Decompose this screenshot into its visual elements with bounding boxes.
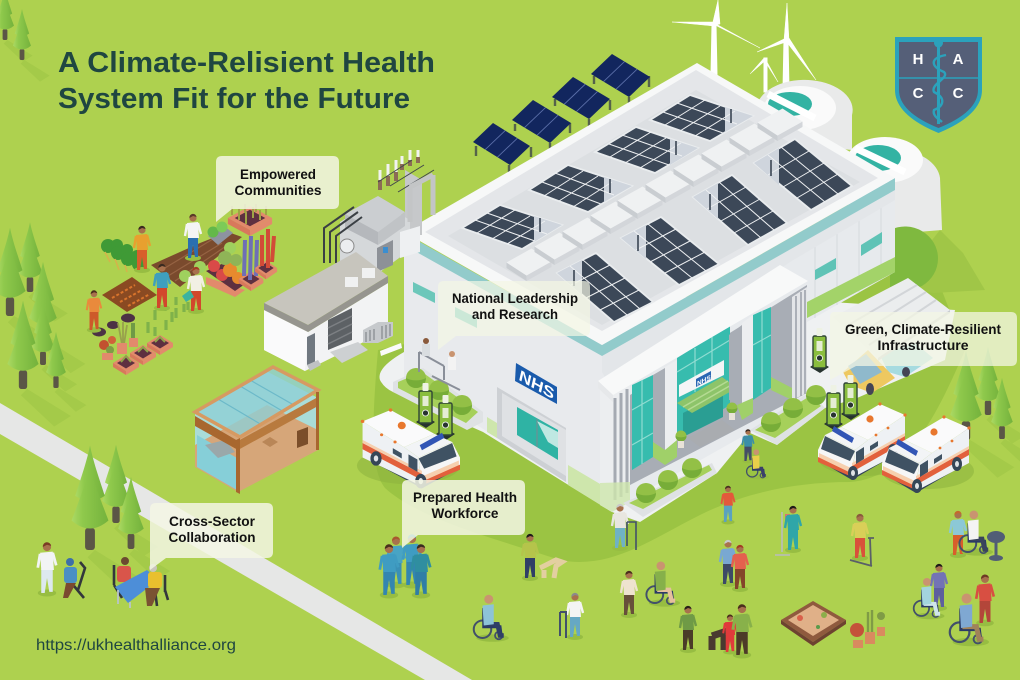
small planters (113, 335, 173, 375)
title: System Fit for the Future (58, 83, 410, 115)
callout: cross-sector collaboration: Collaboration (168, 529, 256, 545)
potted plants (99, 322, 138, 360)
roof ridge vents (506, 108, 802, 281)
glass wall left (632, 375, 653, 470)
trees: right side (950, 347, 1020, 478)
barbecue group (950, 511, 966, 558)
right wall (602, 185, 895, 510)
seedlings (148, 297, 188, 336)
callout: empowered communities (216, 156, 339, 222)
storage tanks (757, 80, 942, 235)
grey pier and white column right (729, 325, 742, 400)
parked blue car (880, 343, 933, 377)
logo shield: C (953, 85, 964, 102)
wheelchair child (646, 561, 680, 607)
callout: green climate-resilient infrastructure (830, 312, 1017, 380)
planter: right (750, 385, 826, 445)
callout: cross-sector collaboration (150, 503, 273, 570)
callout: national leadership and research: National Leadership (452, 290, 578, 306)
hospital plaza (380, 290, 955, 522)
ambulance left (357, 408, 460, 488)
callout: green climate-resilient infrastructure: Infrastructure (878, 337, 969, 353)
glass wall right (753, 307, 771, 400)
back walls (195, 372, 318, 462)
entrance doors (683, 393, 723, 437)
planter with purple plants (239, 236, 263, 291)
elder with carer (720, 540, 736, 587)
carer and wheelchair elder (976, 574, 994, 626)
wind turbines (672, 0, 816, 92)
road (0, 403, 472, 680)
hospital building (404, 63, 895, 512)
timber beams and posts (195, 416, 238, 450)
people: prepared health workforce (380, 534, 430, 598)
trees: left group (0, 222, 86, 426)
callout: national leadership and research (438, 281, 590, 350)
trees: top-left corner (0, 0, 50, 82)
glass shelter (195, 367, 319, 494)
man with leg cast (680, 606, 696, 653)
ground solar arrays (473, 54, 650, 174)
potted plants (850, 610, 885, 648)
callout: green climate-resilient infrastructure: Green, Climate-Resilient (845, 321, 1001, 337)
planter: front (623, 458, 717, 517)
seated man in red (114, 557, 131, 598)
sandbox (781, 601, 846, 646)
seated elder in yellow (145, 564, 168, 606)
doctor (38, 542, 56, 596)
corner column (600, 382, 630, 512)
blue table (115, 570, 158, 608)
people: hospital forecourt (612, 429, 769, 551)
title: A Climate-Relisient Health (58, 47, 435, 79)
EV chargers (416, 328, 860, 440)
large green bush behind the building (890, 226, 985, 293)
left wall small windows (413, 282, 435, 303)
people: lower crowd (474, 506, 1005, 658)
planter: left (393, 368, 483, 430)
crop bed 2 (102, 277, 157, 312)
teal fascia (404, 178, 895, 356)
planter with seedlings (228, 204, 272, 236)
roof frame (195, 367, 318, 437)
small NHS sign (679, 360, 724, 397)
roof solar panels: row 1 (462, 95, 753, 249)
entrance awning (677, 377, 737, 413)
gardeners (134, 226, 150, 273)
side door (497, 387, 566, 482)
front glass (197, 435, 237, 490)
doormat (688, 420, 735, 447)
lettuce patch (101, 239, 146, 272)
people: cross-sector meeting (38, 542, 168, 608)
title (58, 47, 435, 115)
person with guide dog (522, 534, 538, 581)
portico top (598, 265, 808, 395)
ambulance right 1 (818, 402, 910, 480)
right wall windows (815, 258, 836, 280)
callout: empowered communities: Communities (234, 182, 322, 198)
woman with walker (567, 593, 583, 640)
standing man (621, 571, 637, 618)
crop bed 1 (151, 232, 242, 287)
ticket kiosk (297, 427, 308, 448)
left wall (404, 237, 612, 512)
callout: cross-sector collaboration: Cross-Sector (169, 513, 256, 529)
logo shield: H (913, 51, 923, 68)
seated woman (63, 558, 85, 598)
callout: empowered communities: Empowered (240, 166, 316, 182)
logo shield (895, 37, 982, 133)
wall under roof (602, 190, 895, 388)
portico column right (792, 287, 807, 400)
logo shield: C (913, 85, 924, 102)
nurse and patient (931, 564, 947, 611)
ambulance right 2 (882, 415, 974, 493)
shaded lawn under the hospital (374, 260, 965, 562)
floor (195, 405, 318, 492)
roof floor (448, 90, 860, 325)
wall base green strips (487, 417, 497, 438)
community garden (87, 204, 277, 375)
logo shield: A (953, 51, 964, 68)
wheelchair user (474, 595, 509, 642)
NHS sign: NHS (519, 365, 554, 404)
callout: prepared health workforce: Workforce (432, 505, 499, 521)
wheelbarrow of cabbages (208, 222, 233, 245)
entrance recess (630, 285, 807, 485)
air-conditioning units (363, 322, 402, 356)
entrance pots (676, 402, 738, 448)
grey pier and white column left (653, 368, 665, 450)
entrance glass (677, 325, 730, 437)
small NHS sign: NHS (697, 374, 711, 388)
cabbages (179, 242, 236, 282)
trees: by the road (72, 445, 170, 594)
callout: national leadership and research: and Research (472, 306, 558, 322)
roof inner wall (425, 70, 878, 331)
people: lab scene (419, 338, 460, 390)
planter with red and orange vegetables (206, 251, 245, 297)
utility building (264, 252, 402, 371)
person on scooter (852, 514, 868, 561)
roof solar panels: row 2 (557, 139, 852, 322)
dog and family (712, 632, 724, 650)
planter with red plants (255, 229, 277, 279)
callout: prepared health workforce (402, 480, 525, 548)
roof glass (195, 367, 318, 437)
roof parapet (404, 63, 895, 345)
IV stand and nurse (775, 512, 790, 555)
callout: prepared health workforce: Prepared Health (413, 489, 517, 505)
compost mounds (92, 314, 135, 336)
url: https://ukhealthalliance.org (36, 637, 236, 654)
substation (324, 150, 434, 272)
parked yellow car (843, 350, 895, 395)
charging canopy (833, 278, 950, 361)
